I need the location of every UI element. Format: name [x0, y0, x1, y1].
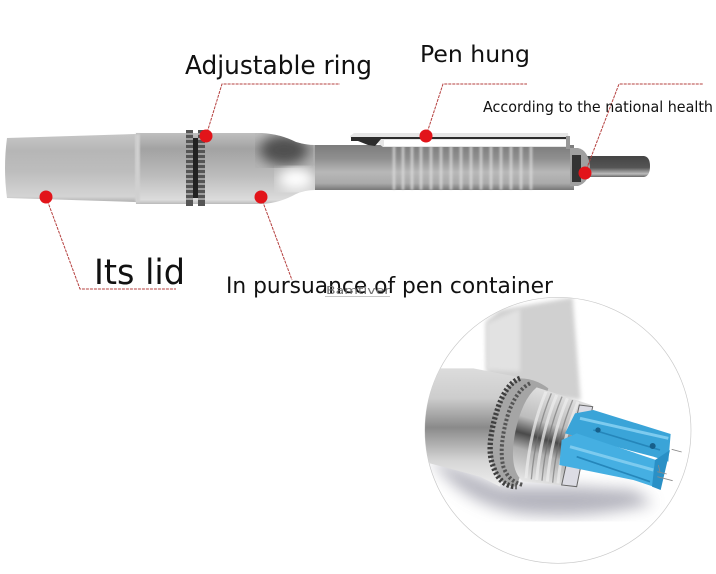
needle tips: [657, 449, 682, 481]
blue needles: [559, 410, 671, 490]
shadow: [430, 457, 653, 515]
barrel: [312, 145, 574, 190]
end cap: [570, 148, 590, 186]
label: pen container: In pursuance of pen container: [226, 274, 554, 299]
ridged grip: [394, 146, 531, 190]
red marker dots: [40, 130, 592, 204]
leader lines: [46, 84, 703, 289]
threaded neck: [513, 387, 592, 487]
pen clip: [350, 133, 570, 149]
label: pen hung: Pen hung: [420, 42, 530, 68]
push rod: [586, 156, 650, 177]
inset: needle cartridge close-up: [420, 297, 691, 563]
label: adjustable ring: Adjustable ring: [185, 51, 372, 81]
knurled collar: [490, 378, 548, 487]
collar opening: [562, 405, 593, 487]
pen illustration: [5, 130, 650, 206]
pen body with taper: [136, 130, 318, 206]
adjustable knurled ring: [186, 130, 205, 206]
lid: [5, 134, 136, 202]
inset circle outline: [425, 297, 691, 563]
watermark: Bamtiver: [326, 284, 391, 297]
horizontal pen section: [425, 368, 508, 486]
label: its lid: Its lid: [94, 253, 185, 293]
upright pen section: [486, 297, 581, 400]
